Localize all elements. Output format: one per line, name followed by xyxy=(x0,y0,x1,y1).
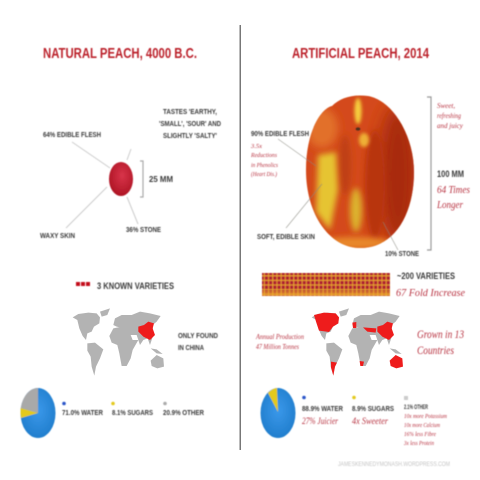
legend: water: 71.0% WATER xyxy=(62,410,103,417)
grown countries: Countries xyxy=(417,343,454,357)
taste description: TASTES 'EARTHY, xyxy=(163,109,217,116)
size note: Longer xyxy=(436,200,463,211)
panel: natural peach diagram: 'SMALL', 'SOUR' AND xyxy=(159,121,221,128)
world map: natural xyxy=(73,308,164,376)
note: taste: Sweet, xyxy=(437,102,455,110)
note: taste: refreshing xyxy=(437,112,461,120)
label: size: 25 MM xyxy=(149,175,173,184)
title: artificial peach: ARTIFICIAL PEACH, 2014 xyxy=(292,45,429,62)
note: reduction in phenolics: Reductions xyxy=(250,152,277,159)
label: edible flesh: 64% EDIBLE FLESH xyxy=(43,132,101,139)
legend: other: 16% less Fibre xyxy=(404,431,436,438)
label: soft edible skin: SOFT, EDIBLE SKIN xyxy=(257,234,315,241)
label: stone: 36% STONE xyxy=(126,227,161,234)
label: edible flesh: 90% EDIBLE FLESH xyxy=(251,131,309,138)
note: reduction in phenolics xyxy=(250,143,278,178)
leader lines xyxy=(278,139,398,250)
legend: sugars: 8.9% SUGARS xyxy=(352,406,394,413)
legend: other xyxy=(163,402,204,417)
panel: natural peach diagram: SLIGHTLY 'SALTY' xyxy=(163,133,217,140)
center divider xyxy=(240,25,241,450)
note: taste: and juicy xyxy=(437,122,464,130)
varieties label: 3 KNOWN VARIETIES xyxy=(97,281,174,291)
legend: other: 10x more Calcium xyxy=(404,422,440,429)
world map: artificial xyxy=(312,308,403,376)
note: reduction in phenolics: 3.5x xyxy=(250,143,262,150)
legend: other: 10x more Potassium xyxy=(404,413,447,420)
legend: water: 27% Juicier xyxy=(302,416,338,426)
panel: natural varieties xyxy=(76,281,174,291)
variety dots xyxy=(76,282,90,286)
small peach xyxy=(109,162,133,196)
varieties label: ~200 VARIETIES xyxy=(397,271,455,281)
annual production: 47 Million Tonnes xyxy=(256,343,299,351)
legend: other: 3x less Protein xyxy=(403,440,434,447)
map note: china: ONLY FOUND xyxy=(178,333,218,340)
size note: 64 Times xyxy=(437,185,470,196)
legend: sugars: 4x Sweeter xyxy=(352,416,388,426)
legend: sugars xyxy=(352,396,394,426)
grown countries: Grown in 13 xyxy=(417,327,464,341)
legend: other xyxy=(403,396,447,447)
china highlighted xyxy=(138,322,155,340)
panel: artificial peach xyxy=(250,90,470,258)
panel: artificial varieties xyxy=(262,271,466,299)
map notes: artificial xyxy=(255,327,464,357)
legend: artificial xyxy=(302,396,447,447)
note: reduction in phenolics: in Phenolics xyxy=(251,162,278,169)
pie chart: artificial xyxy=(260,388,296,438)
title: natural peach: NATURAL PEACH, 4000 B.C. xyxy=(43,45,197,62)
legend: water: 88.9% WATER xyxy=(302,406,343,413)
panel: natural peach diagram xyxy=(40,109,221,240)
legend: water xyxy=(62,402,103,417)
size bracket xyxy=(140,161,143,197)
size note xyxy=(436,185,470,211)
map note: china xyxy=(178,333,218,352)
large peach xyxy=(305,94,415,249)
annual production xyxy=(255,333,304,351)
legend: sugars xyxy=(111,402,153,417)
map note: china: IN CHINA xyxy=(178,345,204,352)
varieties note: 67 Fold Increase xyxy=(396,288,466,299)
leader lines xyxy=(66,142,138,228)
growing regions highlighted xyxy=(314,313,403,376)
legend: other: 2.1% OTHER xyxy=(404,405,428,411)
legend: natural xyxy=(62,402,204,417)
annual production: Annual Production xyxy=(255,333,304,341)
note: reduction in phenolics: (Heart Dis.) xyxy=(251,171,277,178)
legend: water xyxy=(302,396,343,426)
label: waxy skin: WAXY SKIN xyxy=(40,233,75,240)
pie chart: natural xyxy=(20,388,55,438)
label: stone: 10% STONE xyxy=(385,251,419,258)
size bracket xyxy=(427,97,431,250)
note: taste xyxy=(437,102,464,130)
legend: other: 20.9% OTHER xyxy=(163,410,204,417)
grown countries xyxy=(417,327,464,357)
size label: 100 MM xyxy=(437,169,464,179)
source credit: JAMESKENNEDYMONASH.WORDPRESS.COM xyxy=(338,462,450,468)
legend: sugars: 8.1% SUGARS xyxy=(112,410,153,417)
variety grid xyxy=(262,273,390,296)
